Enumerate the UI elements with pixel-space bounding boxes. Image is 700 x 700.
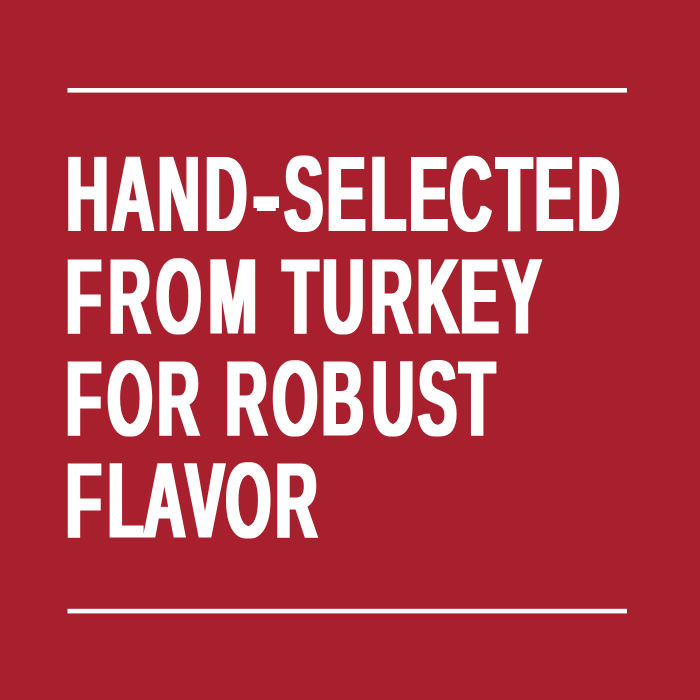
heading: FOR ROBUST xyxy=(66,339,495,459)
bottom rule xyxy=(68,609,627,613)
heading xyxy=(66,134,620,561)
heading: FROM TURKEY xyxy=(66,236,541,357)
heading: HAND-SELECTED xyxy=(66,134,620,256)
heading: FLAVOR xyxy=(66,441,317,561)
top rule xyxy=(68,88,627,93)
